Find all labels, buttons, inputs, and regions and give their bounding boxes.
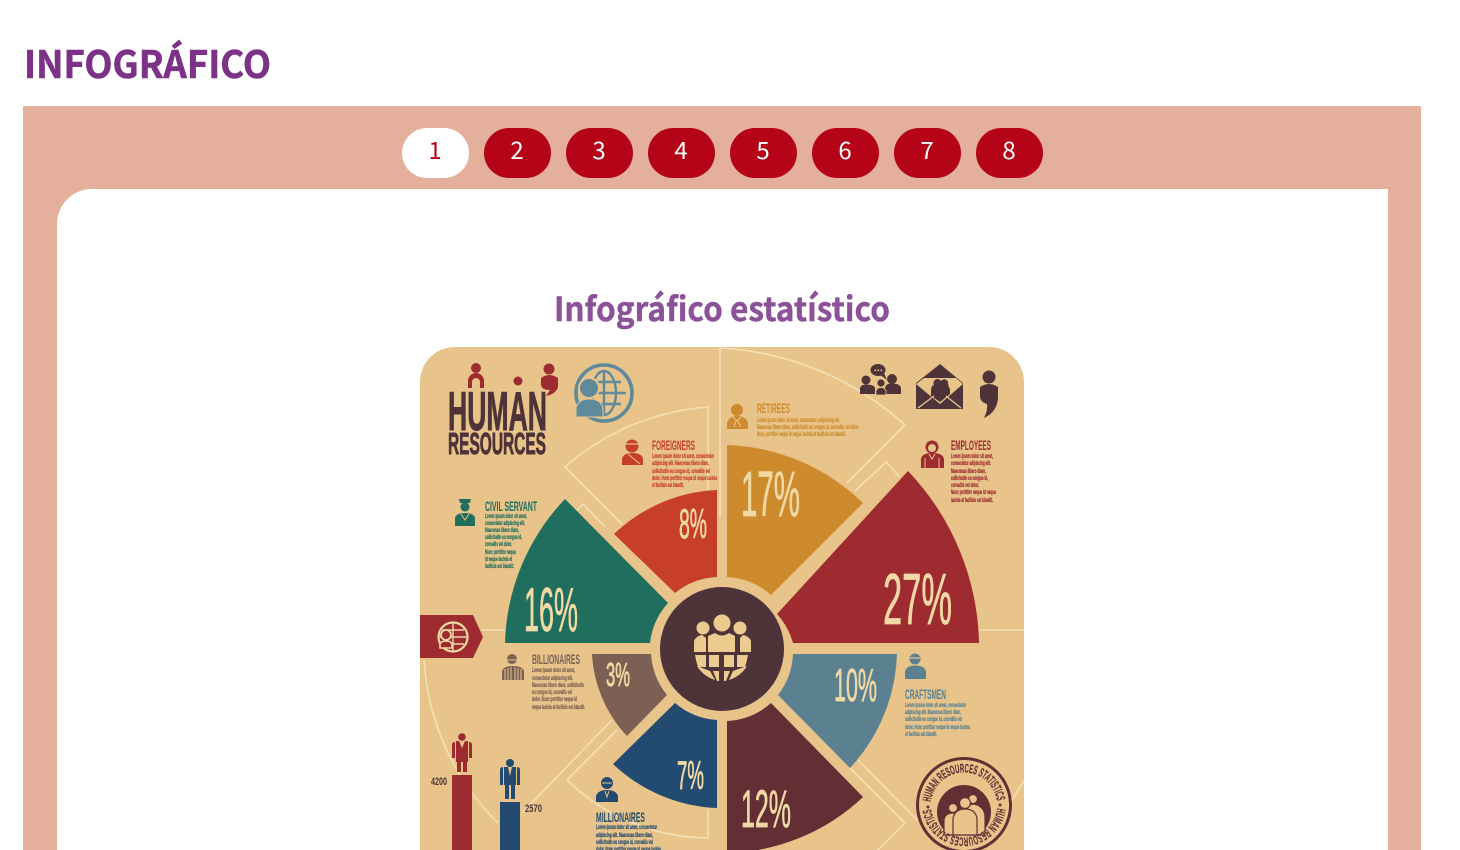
tab 4: 4 [674,131,688,166]
icon: group with speech bubble [860,364,901,395]
pagination tabs [402,128,1043,178]
tab 1 active [402,128,469,178]
block: millionaires: Lorem ipsum dolor sit amet, consectetur [596,825,657,831]
block: retirees: Nunc porttitor neque id neque lacinia et facilisis est blandit. [757,432,846,438]
page title: INFOGRÁFICO [24,34,271,89]
block: craftsmen: sollicitudin eu congue id, convallis vel [905,717,962,723]
block: craftsmen: et facilisis est blandit. [905,732,937,738]
segment: 17% retirees [727,445,863,595]
tab 1 active: 1 [428,131,442,166]
stamp: human resources statistics [916,757,1012,850]
block: employees: Maecenas libero diam, [951,469,986,475]
icon: civil servant [455,499,475,526]
tab 3: 3 [592,131,606,166]
segment: 17% retirees: 17% [741,458,800,530]
icon: craftsman [905,654,926,679]
logo: human resources [448,363,558,461]
segment: 16% civil servant [505,499,668,645]
segment: 7% millionaires: 7% [677,754,704,798]
block: civil servant: consectetur adipiscing elit. [485,521,525,527]
block: retirees: RETIREES [757,400,790,416]
center hub with globe and people [660,587,784,711]
panel: white content card [57,189,1388,850]
block: civil servant: facilisis est blandit. [485,564,514,570]
segment: 8% foreigners [614,490,717,593]
block: civil servant: convallis vel dolor. [485,542,512,548]
stamp: human resources statistics: HUMAN RESOURCES STATISTICS [922,764,1006,802]
tab 2: 2 [510,131,524,166]
block: employees: sollicitudin eu congue id, [951,476,988,482]
icon: person speaking [980,370,998,418]
block: craftsmen: CRAFTSMEN [905,686,946,702]
segment: 3% billionaires: 3% [606,656,630,693]
tab 8 [976,128,1043,178]
logo: human resources: RESOURCES [448,426,546,461]
block: civil servant: sollicitudin eu congue id, [485,535,522,541]
tab 7: 7 [920,131,934,166]
block: civil servant: Nunc porttitor neque [485,550,516,556]
tab 2 [484,128,551,178]
block: employees: lacinia et facilisis est blandit. [951,498,993,504]
segment: 10% craftsmen [778,654,897,768]
segment: 8% foreigners: 8% [679,500,707,547]
block: millionaires: sollicitudin eu congue id, convallis vel [596,840,653,846]
block: craftsmen [905,654,970,738]
block: billionaires: Maecenas libero diam, sollicitudin [532,683,584,689]
block: retirees: Maecenas libero diam, sollicitudin eu congue id, convallis vel dolor. [757,425,859,431]
block: employees [921,437,996,504]
logo: human resources: HUMAN [448,380,547,442]
tab 8: 8 [1002,131,1016,166]
block: billionaires [502,651,585,711]
image background [420,347,1024,850]
bar: men 2570: 2570 [525,803,542,815]
block: employees: convallis vel dolor. [951,483,979,489]
icon: billionaire [502,654,524,680]
block: billionaires: BILLIONAIRES [532,651,580,667]
block: billionaires: dolor. Nunc porttitor neque id [532,697,577,703]
block: employees: Nunc porttitor neque id neque [951,490,996,496]
tab 7 [894,128,961,178]
tab 3 [566,128,633,178]
tab 6: 6 [838,131,852,166]
infographic image [420,347,1024,850]
icon: millionaire [596,777,618,802]
block: employees: EMPLOYEES [951,437,991,453]
block: employees: consectetur adipiscing elit. [951,461,991,467]
segment: 7% millionaires [613,703,717,808]
block: retirees: Lorem ipsum dolor sit amet, consectetur adipiscing elit. [757,418,840,424]
bar chart: gender counts [431,733,542,850]
block: retirees [727,400,859,438]
block: millionaires [596,777,661,850]
block: civil servant: Maecenas libero diam, [485,528,519,534]
block: billionaires: consectetur adipiscing elit. [532,676,573,682]
block: civil servant: id neque lacinia et [485,557,512,563]
block: craftsmen: adipiscing elit. Maecenas libero diam, [905,710,961,716]
tab 5 [730,128,797,178]
segment: 10% craftsmen: 10% [834,659,877,711]
slide heading: Infográfico estatístico [554,283,890,331]
block: craftsmen: Lorem ipsum dolor sit amet, consectetur [905,703,966,709]
thin guide lines [424,348,1026,850]
block: civil servant [455,498,537,570]
stamp: human resources statistics: HUMAN RESOURCES STATISTICS [922,808,1006,846]
block: foreigners: FOREIGNERS [652,437,695,453]
block: foreigners: adipiscing elit. Maecenas libero diam, [652,461,709,467]
icon: globe with person [576,365,632,421]
segment: 16% civil servant: 16% [524,576,578,645]
segment: 3% billionaires [592,654,667,736]
block: civil servant: Lorem ipsum dolor sit amet, [485,514,527,520]
segment: 27% employees: 27% [883,560,952,640]
block: millionaires: MILLIONAIRES [596,809,645,825]
icon: envelope with people [916,364,963,409]
block: billionaires: neque lacinia et facilisis est blandit. [532,705,585,711]
block: foreigners: Lorem ipsum dolor sit amet, consectetur [652,454,714,460]
tab 4 [648,128,715,178]
tab 6 [812,128,879,178]
segment: 12% [727,703,863,850]
block: foreigners: sollicitudin eu congue id, convallis vel [652,469,710,475]
block: foreigners: et facilisis est blandit. [652,483,684,489]
tab 5: 5 [756,131,770,166]
block: foreigners: dolor. Nunc porttitor neque id neque lacinia [652,476,717,482]
icon: employee [921,440,944,468]
block: foreigners [622,437,717,489]
segment: 12%: 12% [741,780,791,839]
block: billionaires: eu congue id, convallis vel [532,690,572,696]
block: millionaires: adipiscing elit. Maecenas libero diam, [596,833,653,839]
block: craftsmen: dolor. Nunc porttitor neque id neque lacinia [905,725,970,731]
block: billionaires: Lorem ipsum dolor sit amet, [532,668,575,674]
infographic image: CIVIL SERVANT [485,498,537,514]
bar: women 4200: 4200 [431,776,447,788]
icon: foreigner [622,440,643,465]
block: employees: Lorem ipsum dolor sit amet, [951,454,993,460]
segment: 27% employees [777,471,979,643]
icon: retiree [727,404,748,429]
arrow tag with globe icon [420,615,483,658]
